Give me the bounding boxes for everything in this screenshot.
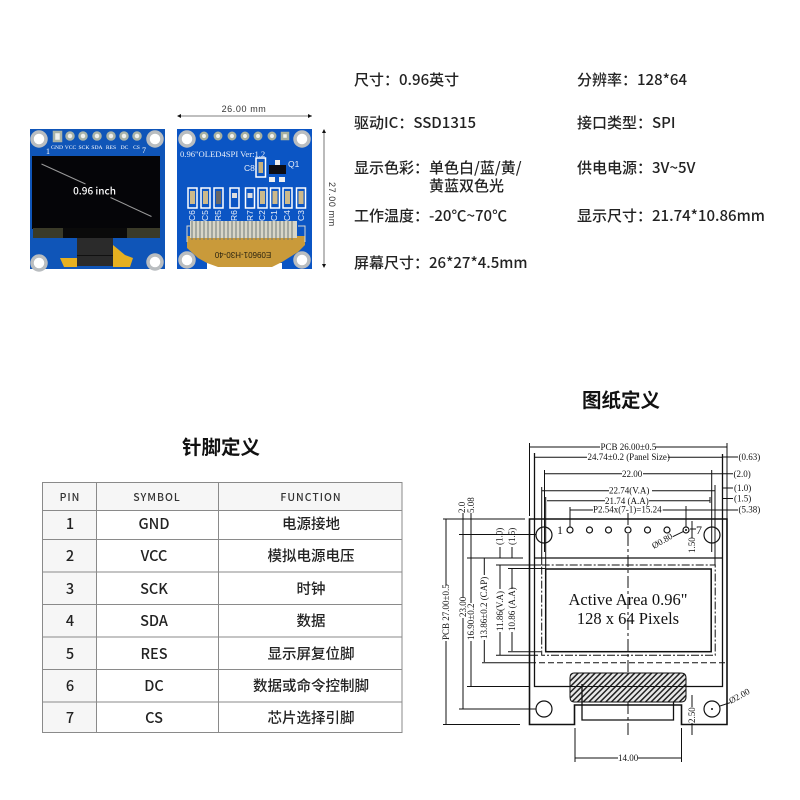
row 7: 芯片选择引脚 — [268, 707, 354, 728]
top dimension labels: 22.00 — [622, 469, 643, 479]
photo: OLED module back — [177, 129, 312, 269]
C8 and Q1 — [256, 158, 286, 182]
top dimension labels: 1 — [557, 523, 563, 537]
specs left column: 尺寸：0.96英寸 — [354, 69, 459, 90]
top dimension labels: 24.74±0.2 (Panel Size) — [588, 452, 670, 462]
left dimension labels: 13.86±0.2 (CAP) — [479, 577, 489, 639]
row 7: CS — [145, 707, 163, 728]
row 6: DC — [144, 675, 164, 696]
row 3 — [66, 578, 326, 599]
back pins — [201, 133, 288, 139]
holes — [536, 527, 720, 717]
component labels: C1 — [269, 210, 279, 221]
bottom dimension labels: Ø2.00 — [727, 686, 752, 706]
specs left column — [354, 69, 528, 273]
row 2: VCC — [140, 545, 167, 566]
mechanical drawing — [441, 442, 760, 763]
row 3: 时钟 — [296, 578, 326, 599]
specs right column: 供电电源：3V~5V — [577, 157, 696, 178]
specs left column: 工作温度：-20℃~70℃ — [354, 205, 507, 226]
header pins — [54, 132, 140, 141]
left dimension labels: 2.0 — [457, 501, 467, 513]
row 7: 7 — [66, 707, 74, 728]
dimension: height 27.00 mm: 27.00 mm — [327, 182, 337, 227]
dimension: width 26.00 mm — [177, 104, 312, 118]
ribbon cable — [60, 245, 133, 267]
top dimension labels: (2.0) — [734, 469, 751, 479]
left dimension labels: 10.86 (A.A) — [507, 587, 517, 631]
mounting holes — [32, 132, 162, 270]
pin labels: VCC — [65, 145, 77, 151]
bottom dimension labels: 2.50 — [687, 707, 697, 723]
screen — [32, 156, 160, 229]
centerline — [627, 513, 629, 735]
table header: SYMBOL — [133, 490, 181, 505]
pin labels: 1 — [46, 147, 50, 156]
left dimension labels: 16.90±0.2 — [466, 604, 476, 640]
photo: OLED module back: Q1 — [288, 159, 300, 169]
left dimension labels: 5.08 — [466, 497, 476, 513]
back holes — [180, 132, 309, 267]
row 6: 6 — [66, 675, 74, 696]
row 5: RES — [140, 643, 168, 664]
specs left column: 屏幕尺寸：26*27*4.5mm — [354, 252, 528, 273]
table header: FUNCTION — [280, 490, 342, 505]
top dimension labels: (1.5) — [734, 494, 751, 504]
dimension: height 27.00 mm — [322, 129, 337, 268]
component labels: C5 — [200, 210, 210, 221]
top dimension labels: (1.0) — [734, 483, 751, 493]
row 4 — [66, 610, 326, 631]
row 5: 显示屏复位脚 — [268, 643, 354, 664]
pin labels — [46, 145, 146, 156]
silkscreen: 0.96"OLED4SPI Ver:1.2 — [180, 149, 265, 159]
bottom dimension labels: 14.00 — [618, 753, 639, 763]
top dimension labels: PCB 26.00±0.5 — [600, 442, 657, 452]
component labels — [187, 210, 306, 221]
component labels: R6 — [229, 210, 239, 221]
dimension: width 26.00 mm: 26.00 mm — [222, 104, 266, 114]
panel outline — [534, 453, 722, 686]
bottom dimension labels — [618, 686, 752, 763]
left dimension labels: (1.0) — [494, 528, 504, 545]
row 3: SCK — [140, 578, 168, 599]
component labels: C3 — [296, 210, 306, 221]
row 5 — [66, 643, 354, 664]
row 2: 模拟电源电压 — [268, 545, 354, 566]
active area text — [568, 590, 688, 628]
left dimension labels: (1.5) — [507, 528, 517, 545]
flex connector — [207, 263, 282, 269]
table header: PIN — [60, 490, 80, 505]
hatched ribbon — [570, 673, 686, 702]
active area — [546, 569, 711, 652]
photo: OLED module front — [30, 129, 165, 270]
pin labels: SCK — [79, 145, 89, 151]
row 5: 5 — [66, 643, 74, 664]
heading: pin definition: 针脚定义 — [182, 431, 260, 460]
heading: drawing definition: 图纸定义 — [582, 384, 660, 413]
pin labels: DC — [121, 145, 129, 151]
row 3: 3 — [66, 578, 74, 599]
top dimension lines — [530, 443, 738, 569]
top dimension labels: 21.74 (A.A) — [605, 496, 649, 506]
size label: 0.96 inch — [73, 182, 116, 198]
top dimension labels: (5.38) — [738, 504, 760, 514]
row 4: 数据 — [296, 610, 326, 631]
component labels: R7 — [245, 210, 255, 221]
row 1 — [66, 513, 340, 534]
table header — [60, 490, 342, 505]
specs right column: 分辨率：128*64 — [577, 69, 687, 90]
bottom dimensions — [575, 532, 730, 762]
row 6: 数据或命令控制脚 — [253, 675, 369, 696]
row 1: 1 — [66, 513, 74, 534]
row 7 — [66, 707, 354, 728]
specs left column: 黄蓝双色光 — [429, 175, 504, 196]
left dimension lines — [443, 513, 545, 724]
pin labels: 7 — [142, 146, 146, 155]
row 2: 2 — [66, 545, 74, 566]
left dimension labels: 23.00 — [458, 596, 468, 617]
component labels: C6 — [187, 210, 197, 221]
specs left column: 显示色彩：单色白/蓝/黄/ — [354, 157, 522, 178]
specs right column: 接口类型：SPI — [577, 112, 675, 133]
top dimension labels: 1.50 — [687, 537, 697, 553]
pin labels: CS — [133, 145, 140, 151]
active area text: 128 x 64 Pixels — [577, 609, 679, 628]
row 2 — [66, 545, 354, 566]
top dimension labels: P2.54x(7-1)=15.24 — [593, 504, 662, 514]
row 1: GND — [139, 513, 169, 534]
row 6 — [66, 675, 369, 696]
pin labels: SDA — [91, 145, 103, 151]
top dimension labels — [557, 442, 760, 553]
pin labels: GND — [51, 145, 63, 151]
pin table — [42, 482, 402, 733]
left dimension labels: PCB 27.00±0.5 — [441, 584, 451, 640]
diagonal — [42, 164, 152, 216]
top dimension labels: Ø0.80 — [650, 531, 675, 551]
active area text: Active Area 0.96" — [568, 590, 688, 609]
row 1: 电源接地 — [282, 513, 340, 534]
component labels: C4 — [282, 210, 292, 221]
left dimension labels — [441, 497, 517, 640]
left dimension labels: 11.86(V.A) — [495, 591, 505, 631]
top dimension labels: 7 — [696, 523, 702, 537]
top dimension labels: 22.74(V.A) — [609, 486, 649, 496]
row 4: SDA — [140, 610, 169, 631]
photo: OLED module back: C8 — [244, 163, 255, 173]
row 4: 4 — [66, 610, 74, 631]
photo: OLED module back: E09601-H30-40 — [214, 250, 271, 259]
specs right column: 显示尺寸：21.74*10.86mm — [577, 205, 765, 226]
components row — [188, 188, 306, 208]
specs left column: 驱动IC：SSD1315 — [354, 112, 476, 133]
component labels: R5 — [213, 210, 223, 221]
PCB outline — [530, 519, 727, 724]
top dimension labels: (0.63) — [738, 452, 760, 462]
specs right column — [577, 69, 765, 226]
pin labels: RES — [106, 145, 116, 151]
component labels: C2 — [257, 210, 267, 221]
